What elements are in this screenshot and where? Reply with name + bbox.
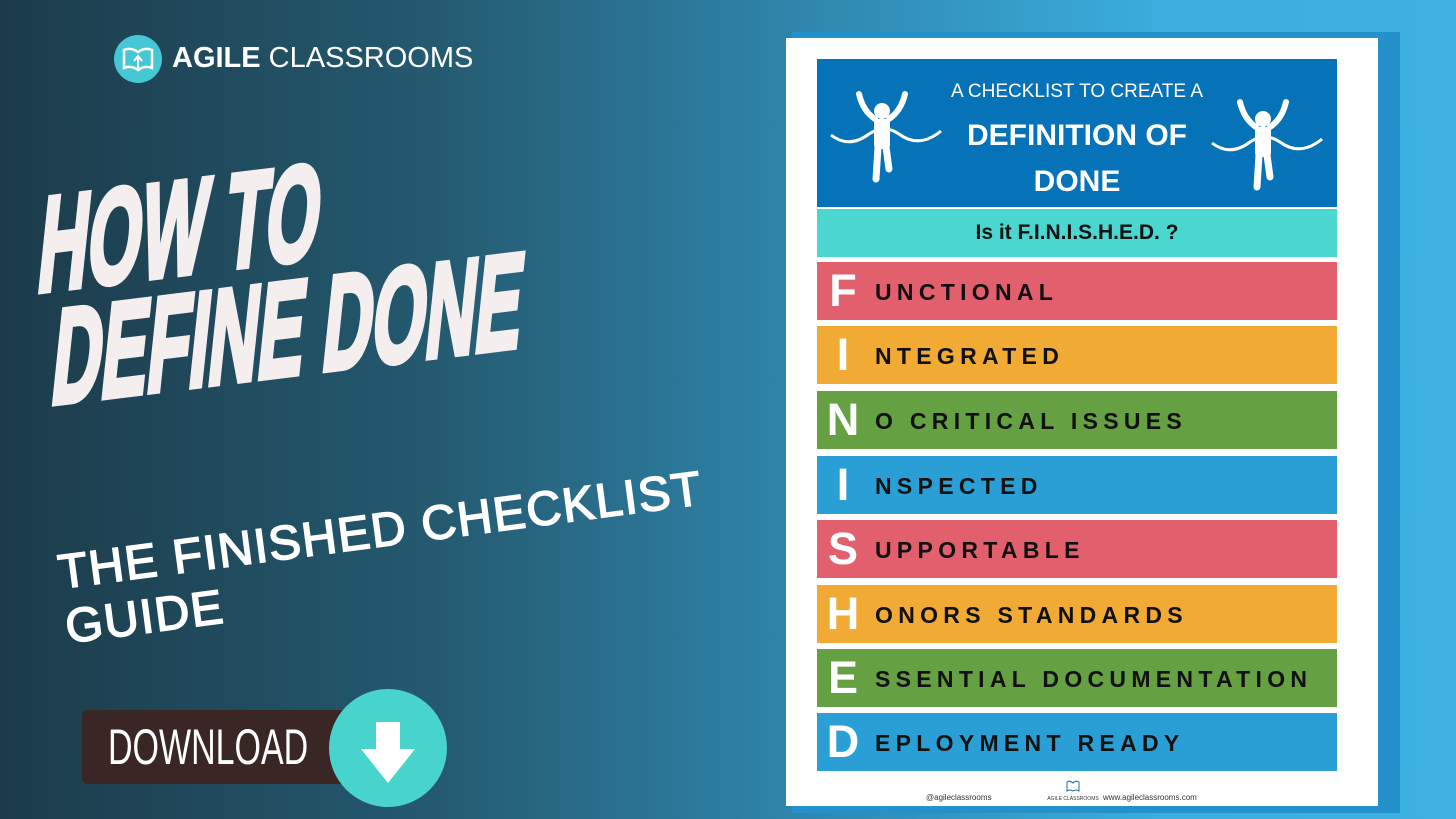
text: DEFINE DONE — [46, 225, 531, 434]
teal banner — [817, 209, 1337, 257]
row: Inspected: I — [837, 459, 849, 510]
row: Integrated: NTEGRATED — [875, 342, 1064, 368]
row: Functional — [817, 262, 1337, 320]
row: Honors standards — [817, 585, 1337, 643]
footer handle: @agileclassrooms — [926, 793, 991, 802]
row: Deployment ready: D — [827, 716, 859, 767]
row: No critical issues: O CRITICAL ISSUES — [875, 408, 1187, 434]
row: Honors standards: H — [827, 588, 859, 639]
row: Deployment ready — [817, 713, 1337, 771]
row: Inspected — [817, 456, 1337, 514]
row: Essential documentation: E — [828, 652, 858, 703]
row: Honors standards: ONORS STANDARDS — [875, 602, 1188, 628]
icon: download arrow — [329, 689, 447, 807]
row: No critical issues: N — [827, 394, 859, 445]
brand name: AGILE CLASSROOMS — [172, 42, 473, 74]
row: Essential documentation: SSENTIAL DOCUMENTATION — [875, 666, 1312, 692]
button label: DOWNLOAD — [108, 719, 308, 775]
footer url: www.agileclassrooms.com — [1103, 793, 1197, 802]
text: main heading — [967, 119, 1187, 198]
icon: runner left — [830, 91, 942, 182]
row: Functional: F — [829, 265, 857, 316]
title — [32, 136, 531, 434]
button label — [82, 710, 352, 784]
row: No critical issues — [817, 391, 1337, 449]
logo — [114, 35, 473, 83]
footer logo: AGILE CLASSROOMS — [1047, 796, 1099, 802]
teal banner: Is it F.I.N.I.S.H.E.D. ? — [975, 221, 1179, 244]
footer logo — [1047, 780, 1099, 802]
subtitle: THE FINISHED CHECKLIST — [55, 462, 706, 600]
row: Integrated: I — [837, 329, 849, 380]
poster — [786, 38, 1378, 806]
poster header — [817, 59, 1337, 207]
text: main heading: DONE — [1034, 165, 1120, 198]
row: Functional: UNCTIONAL — [875, 278, 1058, 304]
text: main heading: DEFINITION OF — [967, 119, 1187, 152]
text: HOW TO — [32, 136, 329, 322]
row: Supportable: UPPORTABLE — [875, 536, 1085, 562]
row: Supportable — [817, 520, 1337, 578]
text: subheading: A CHECKLIST TO CREATE A — [951, 81, 1203, 102]
row: Supportable: S — [828, 523, 858, 574]
row: Inspected: NSPECTED — [875, 472, 1043, 498]
row: Deployment ready: EPLOYMENT READY — [875, 730, 1185, 756]
row: Integrated — [817, 326, 1337, 384]
poster footer — [926, 780, 1197, 802]
subtitle: GUIDE — [62, 581, 227, 654]
icon: book — [114, 35, 162, 83]
poster shadow — [792, 32, 1400, 813]
download button — [82, 689, 447, 807]
row: Essential documentation — [817, 649, 1337, 707]
icon: runner right — [1211, 99, 1323, 190]
